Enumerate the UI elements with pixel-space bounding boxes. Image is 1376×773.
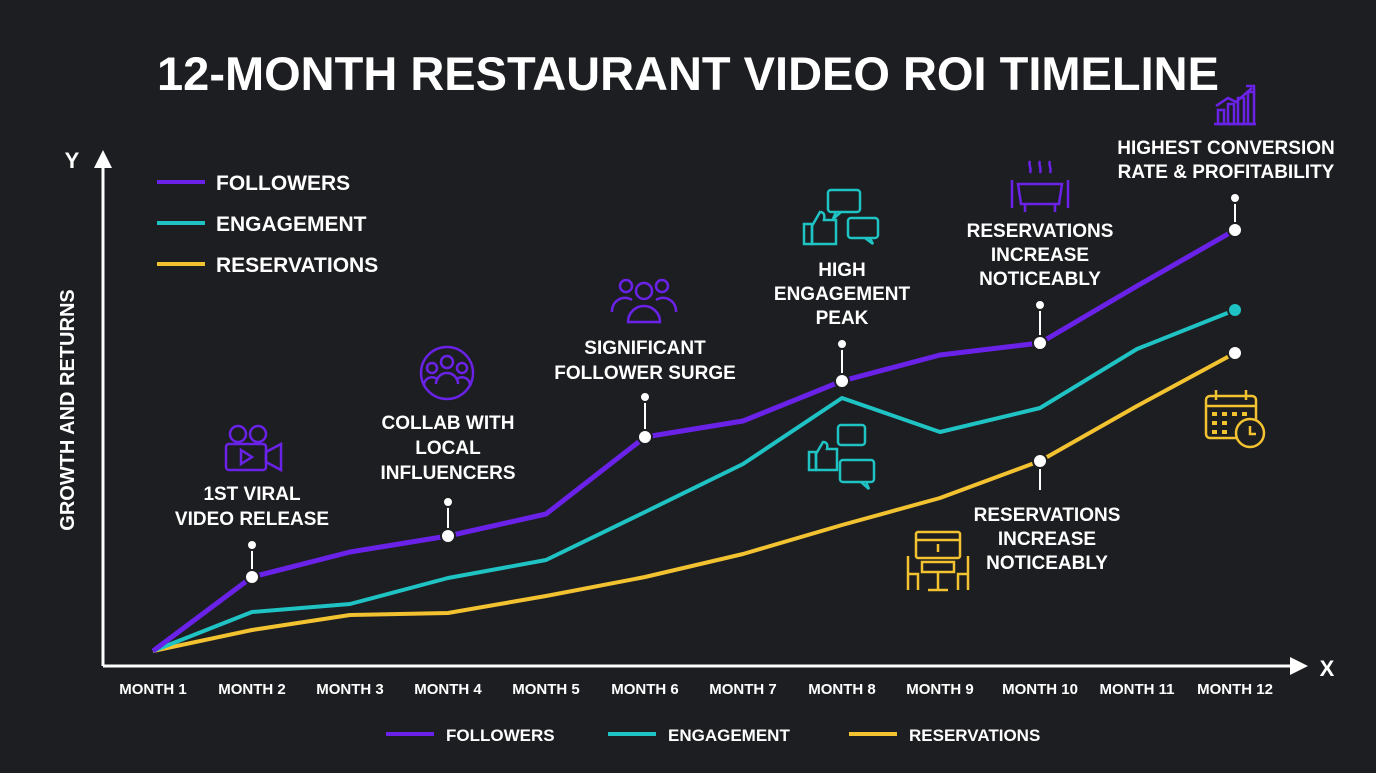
axes bbox=[94, 150, 1308, 675]
axis labels: Y bbox=[65, 148, 80, 173]
month labels: MONTH 3 bbox=[316, 681, 384, 698]
month labels: MONTH 6 bbox=[611, 681, 679, 698]
legend bottom: FOLLOWERS bbox=[446, 726, 555, 745]
icon: growth chart bbox=[1214, 86, 1256, 124]
legend bottom bbox=[386, 726, 1040, 745]
icon: thumbs up chat teal bottom bbox=[809, 425, 874, 489]
month labels: MONTH 10 bbox=[1002, 681, 1078, 698]
annotations: VIDEO RELEASE bbox=[175, 509, 329, 530]
annotations: RATE & PROFITABILITY bbox=[1118, 162, 1335, 183]
annotations: INCREASE bbox=[991, 245, 1089, 266]
annotations: FOLLOWER SURGE bbox=[554, 363, 736, 384]
annotations: LOCAL bbox=[415, 438, 481, 459]
month labels: MONTH 7 bbox=[709, 681, 777, 698]
month labels: MONTH 11 bbox=[1099, 681, 1175, 698]
legend top: FOLLOWERS bbox=[216, 172, 350, 195]
annotations: HIGHEST CONVERSION bbox=[1117, 138, 1335, 159]
annotations: COLLAB WITH bbox=[382, 413, 514, 434]
annotations: SIGNIFICANT bbox=[584, 338, 706, 359]
month labels: MONTH 12 bbox=[1197, 681, 1273, 698]
axis labels: GROWTH AND RETURNS bbox=[57, 289, 79, 531]
annotations: 1ST VIRAL bbox=[203, 484, 301, 505]
line: reservations bbox=[153, 353, 1235, 651]
icon: thumbs up chat teal top bbox=[804, 190, 878, 244]
annotations: RESERVATIONS bbox=[974, 505, 1120, 526]
line: followers bbox=[153, 230, 1235, 651]
month labels: MONTH 4 bbox=[414, 681, 482, 698]
markers bbox=[245, 193, 1242, 584]
annotations: PEAK bbox=[816, 308, 869, 329]
line: engagement bbox=[153, 310, 1235, 651]
title: 12-MONTH RESTAURANT VIDEO ROI TIMELINE bbox=[157, 47, 1219, 100]
annotations bbox=[175, 138, 1335, 574]
month labels: MONTH 1 bbox=[119, 681, 187, 698]
annotations: HIGH bbox=[818, 260, 866, 281]
icon: video camera bbox=[226, 426, 281, 470]
month labels: MONTH 2 bbox=[218, 681, 286, 698]
icon: group bbox=[612, 280, 676, 322]
icon: influencers bbox=[421, 347, 473, 399]
icon: dining table yellow bbox=[908, 532, 968, 590]
legend top: RESERVATIONS bbox=[216, 254, 378, 277]
annotations: INFLUENCERS bbox=[380, 463, 516, 484]
legend bottom: RESERVATIONS bbox=[909, 726, 1040, 745]
annotations: INCREASE bbox=[998, 529, 1096, 550]
axis labels bbox=[57, 148, 1335, 681]
month labels: MONTH 8 bbox=[808, 681, 876, 698]
legend bottom: ENGAGEMENT bbox=[668, 726, 790, 745]
legend top bbox=[157, 172, 378, 277]
month labels: MONTH 9 bbox=[906, 681, 974, 698]
icon: table purple bbox=[1012, 161, 1068, 212]
icon: calendar bbox=[1206, 390, 1264, 447]
annotations: ENGAGEMENT bbox=[774, 284, 910, 305]
annotations: NOTICEABLY bbox=[986, 553, 1108, 574]
axis labels: X bbox=[1320, 656, 1335, 681]
annotations: NOTICEABLY bbox=[979, 269, 1101, 290]
month labels: MONTH 5 bbox=[512, 681, 580, 698]
legend top: ENGAGEMENT bbox=[216, 213, 367, 236]
annotations: RESERVATIONS bbox=[967, 221, 1113, 242]
month labels bbox=[119, 681, 1273, 698]
